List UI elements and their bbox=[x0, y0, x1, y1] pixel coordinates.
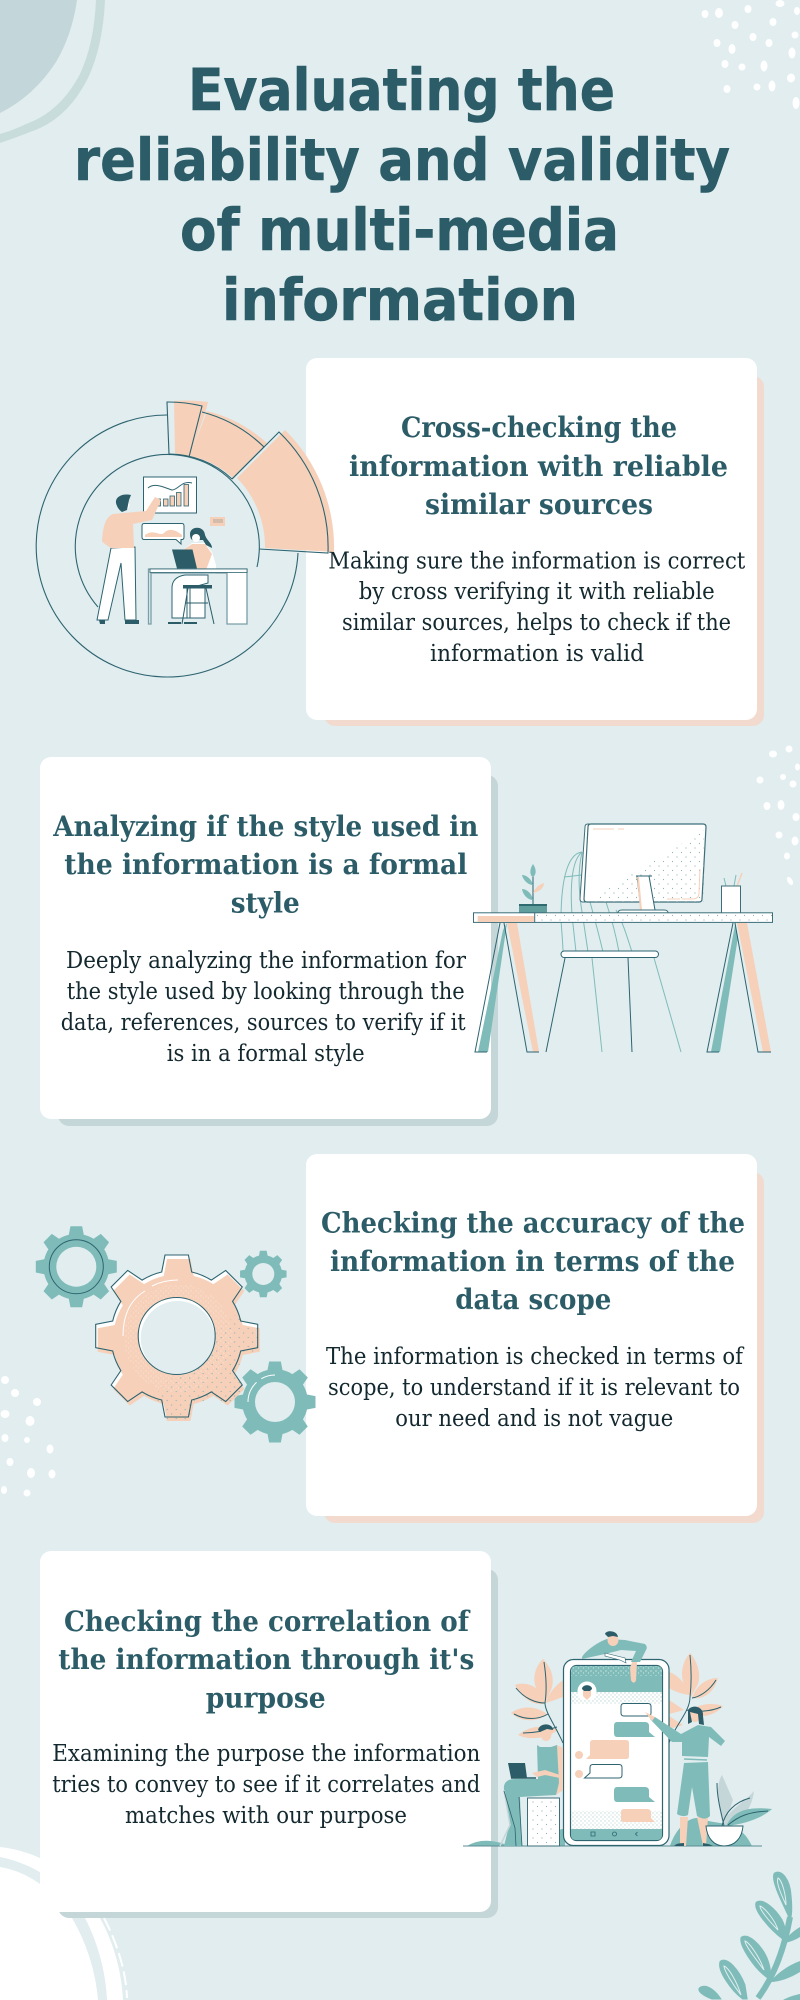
title: information bbox=[222, 267, 578, 334]
gear: top-left teal bbox=[36, 1226, 117, 1307]
heading: data scope: information in terms of the bbox=[330, 1245, 735, 1278]
chart board bbox=[144, 477, 196, 513]
text: cross-checking body: by cross verifying it with reliable bbox=[359, 579, 715, 605]
gear: large peach bbox=[96, 1255, 260, 1421]
speech bubbles bbox=[142, 517, 225, 544]
heading: cross-checking bbox=[349, 411, 728, 521]
heading: formal style: Analyzing if the style used in bbox=[52, 810, 478, 843]
text: formal style body: Deeply analyzing the information for bbox=[66, 948, 466, 974]
heading: data scope: Checking the accuracy of the bbox=[321, 1207, 745, 1240]
peach ring segments bbox=[174, 400, 334, 552]
decoration: bottom-left white circle bbox=[0, 1847, 127, 2000]
title: reliability and validity bbox=[74, 127, 730, 194]
monitor bbox=[580, 824, 707, 913]
chair back bbox=[561, 852, 681, 1052]
table legs bbox=[475, 923, 771, 1052]
panel: purpose bbox=[40, 1551, 498, 1918]
plant pot bbox=[519, 864, 547, 913]
heading: purpose bbox=[58, 1605, 474, 1714]
gear: small right teal bbox=[240, 1251, 287, 1297]
text: purpose body: matches with our purpose bbox=[125, 1803, 407, 1829]
avatar bbox=[578, 1682, 596, 1700]
ground and hills bbox=[463, 1818, 762, 1846]
decoration: top-right dots bbox=[702, 0, 800, 109]
gear: bottom right teal bbox=[234, 1362, 316, 1442]
decoration: right dots beside desk bbox=[756, 746, 800, 886]
heading: purpose: Checking the correlation of bbox=[64, 1605, 471, 1638]
title: Evaluating the bbox=[188, 57, 615, 124]
illustration: phone chat with people bbox=[463, 1631, 772, 1846]
title bbox=[74, 57, 730, 334]
ring outlines bbox=[36, 402, 328, 677]
heading: purpose: purpose bbox=[206, 1682, 326, 1715]
chat bubbles bbox=[575, 1704, 655, 1822]
person leaning over phone bbox=[582, 1631, 647, 1683]
panel: cross-checking bbox=[306, 358, 764, 726]
man pointing at chart bbox=[97, 494, 161, 624]
table top bbox=[474, 913, 772, 922]
illustration: people with data rings bbox=[36, 400, 334, 677]
heading: formal style bbox=[52, 810, 478, 920]
pen cup bbox=[722, 873, 742, 913]
heading: cross-checking: Cross-checking the bbox=[401, 411, 677, 444]
heading: formal style: the information is a formal bbox=[64, 848, 467, 881]
heading: formal style: style bbox=[231, 886, 300, 919]
heading: data scope bbox=[321, 1206, 745, 1316]
illustration: gears bbox=[36, 1226, 316, 1442]
text: formal style body: data, references, sources to verify if it bbox=[61, 1010, 466, 1036]
text: formal style body: the style used by looking through the bbox=[67, 979, 465, 1005]
text: data scope body bbox=[326, 1344, 744, 1432]
heading: purpose: the information through it's bbox=[58, 1643, 474, 1676]
heading: cross-checking: information with reliable bbox=[349, 450, 728, 483]
text: cross-checking body: similar sources, helps to check if the bbox=[342, 610, 731, 636]
title: of multi-media bbox=[180, 197, 619, 264]
man with laptop on box bbox=[500, 1724, 563, 1846]
text: data scope body: The information is checked in terms of bbox=[326, 1344, 744, 1370]
decoration: top-left brush circle bbox=[0, 0, 105, 143]
woman at desk with laptop bbox=[168, 528, 216, 624]
text: purpose body: Examining the purpose the information bbox=[52, 1741, 480, 1767]
phone bbox=[564, 1660, 669, 1846]
potted plant bbox=[706, 1775, 772, 1846]
text: data scope body: our need and is not vague bbox=[395, 1406, 673, 1432]
woman pointing at phone bbox=[645, 1707, 725, 1846]
heading: cross-checking: similar sources bbox=[425, 488, 653, 521]
text: purpose body: tries to convey to see if it correlates and bbox=[52, 1772, 481, 1798]
illustration: desk and monitor bbox=[474, 824, 772, 1052]
heading: data scope: data scope bbox=[455, 1283, 611, 1316]
panel: data scope bbox=[306, 1154, 764, 1523]
decoration: left dots beside gears bbox=[0, 1376, 56, 1496]
text: data scope body: scope, to understand if it is relevant to bbox=[328, 1375, 740, 1401]
text: formal style body: is in a formal style bbox=[167, 1041, 365, 1067]
text: purpose body bbox=[52, 1741, 481, 1829]
text: cross-checking body bbox=[328, 548, 746, 667]
text: cross-checking body: information is valid bbox=[430, 641, 644, 667]
text: formal style body bbox=[61, 948, 466, 1067]
text: cross-checking body: Making sure the information is correct bbox=[328, 548, 746, 574]
chair seat and legs bbox=[546, 951, 658, 1052]
peach leaves bbox=[511, 1653, 723, 1743]
desk bbox=[148, 569, 247, 624]
decoration: bottom-right plant bbox=[700, 1873, 800, 2000]
panel: formal style bbox=[40, 757, 498, 1126]
